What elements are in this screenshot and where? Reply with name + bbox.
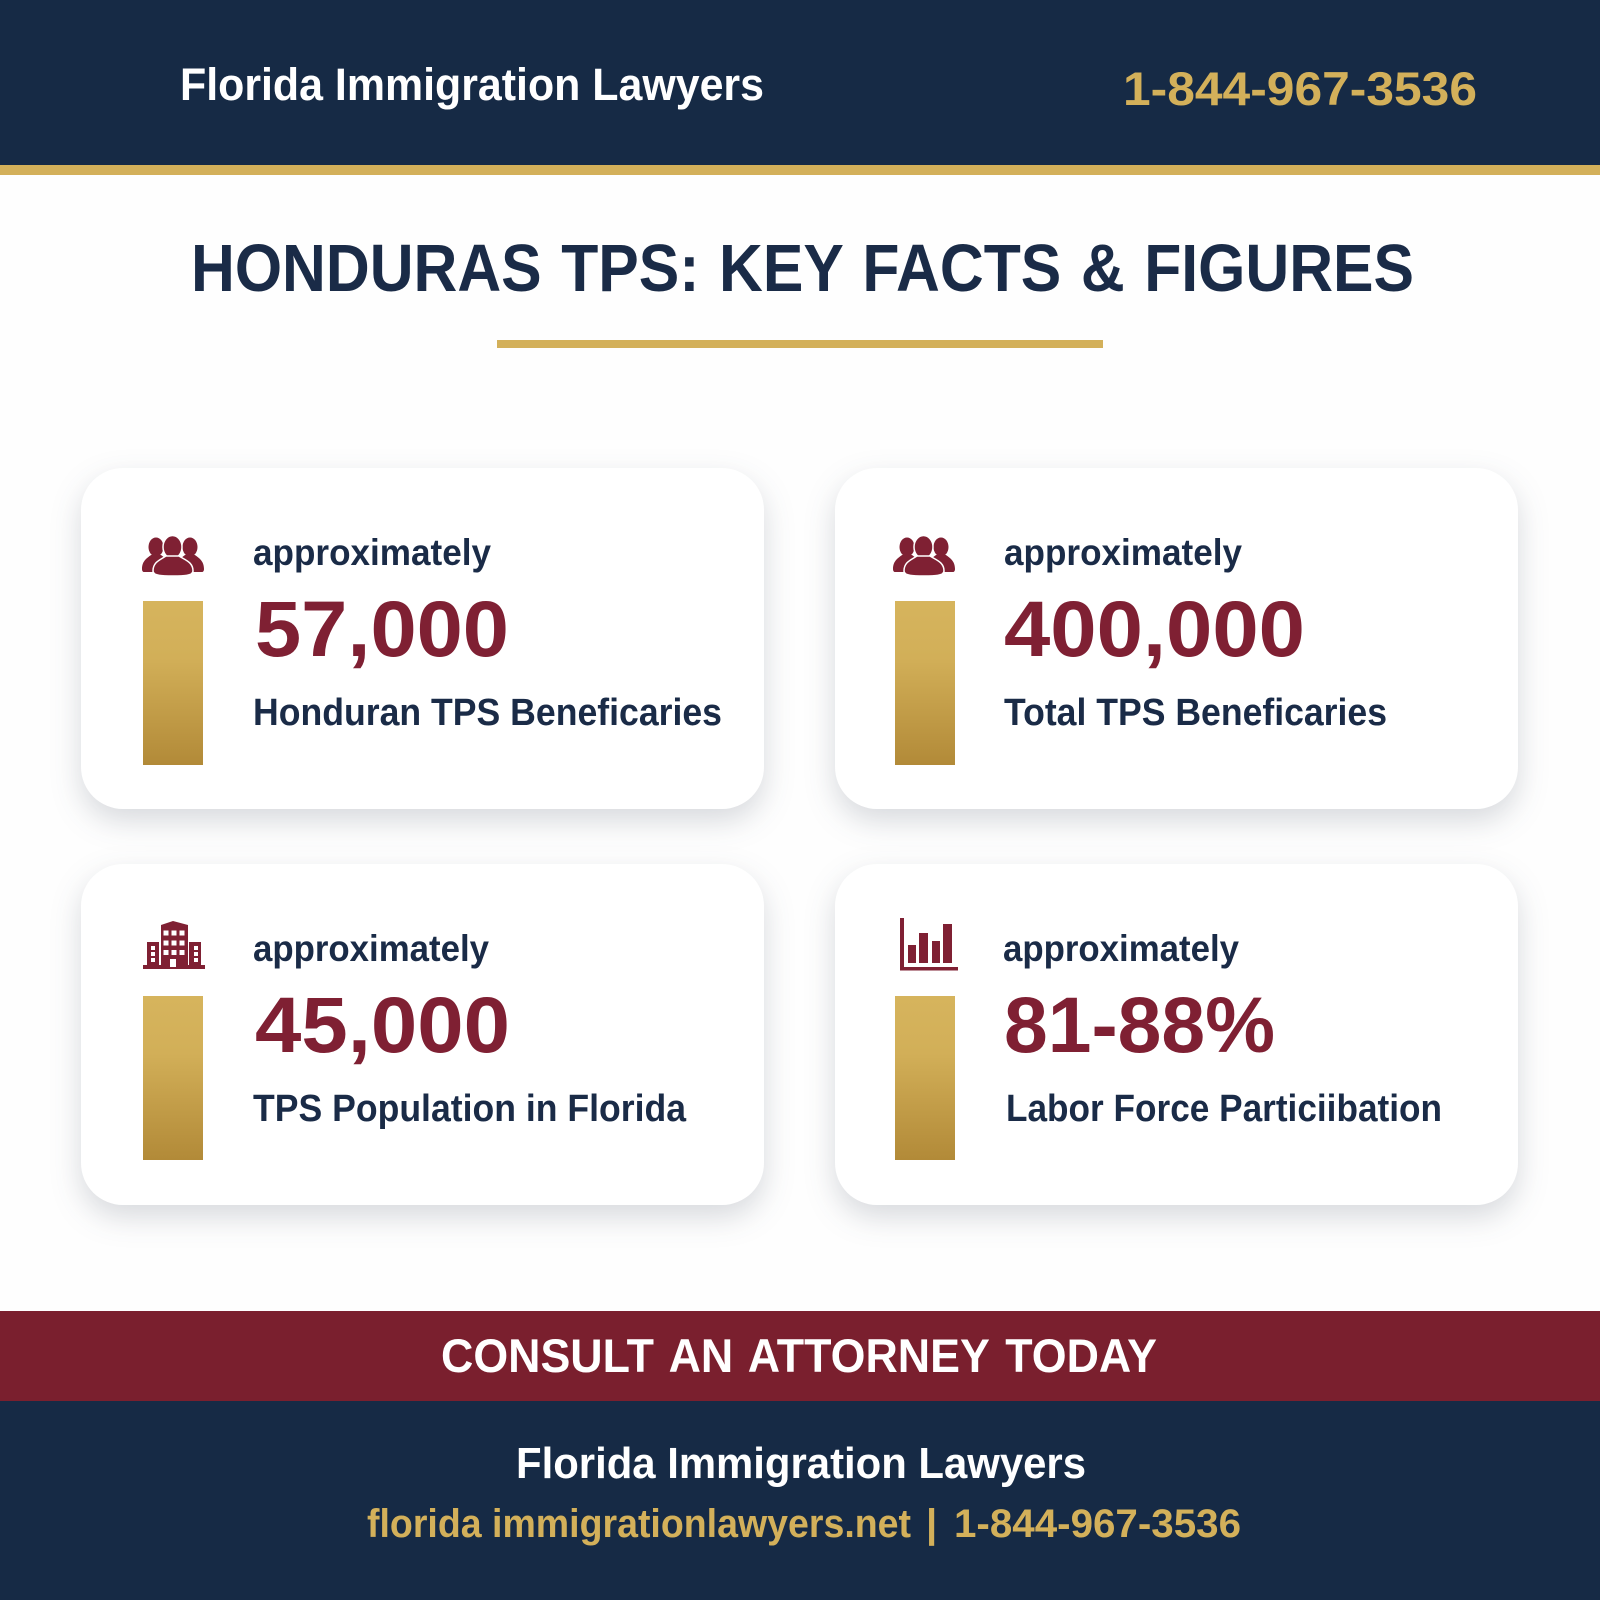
caption: Labor Force Particiibation [1006,1088,1442,1130]
footer contact line: | [926,1502,937,1546]
footer contact line: florida immigrationlawyers.net [367,1502,911,1546]
footer contact line [367,1502,1241,1546]
title [191,231,1414,348]
panel: labor force participation [835,864,1518,1205]
panel: TPS population in Florida [81,864,764,1205]
header band: Florida Immigration Lawyers [180,59,764,110]
call to action band: CONSULT AN ATTORNEY TODAY [441,1329,1157,1382]
qualifier text: approximately [1004,532,1242,573]
figure: 400,000: 400,000 [1004,584,1305,673]
icon: people [893,536,955,576]
qualifier text: approximately [253,928,489,969]
caption: Total TPS Beneficaries [1004,692,1387,734]
icon: bar chart [900,918,958,970]
header band: 1-844-967-3536 [1123,62,1477,115]
icon: building [143,921,205,969]
qualifier text: approximately [1003,928,1239,969]
figure: 57,000: 57,000 [255,584,509,673]
gold bar [895,996,955,1160]
header band [0,0,1600,175]
footer contact line: 1-844-967-3536 [954,1502,1241,1546]
caption: Honduran TPS Beneficaries [253,692,722,734]
call to action band [0,1311,1600,1401]
figure: 45,000: 45,000 [255,980,510,1069]
panel: total TPS beneficiaries [835,468,1518,809]
figure: 81-88%: 81-88% [1004,980,1275,1069]
icon: people [142,536,204,576]
title: HONDURAS TPS: KEY FACTS & FIGURES [191,231,1414,306]
footer firm name: Florida Immigration Lawyers [516,1439,1086,1488]
gold bar [143,601,203,765]
footer band [0,1401,1600,1600]
gold bar [895,601,955,765]
caption: TPS Population in Florida [253,1088,687,1130]
panel: Honduran TPS beneficiaries [81,468,764,809]
gold bar [143,996,203,1160]
qualifier text: approximately [253,532,491,573]
